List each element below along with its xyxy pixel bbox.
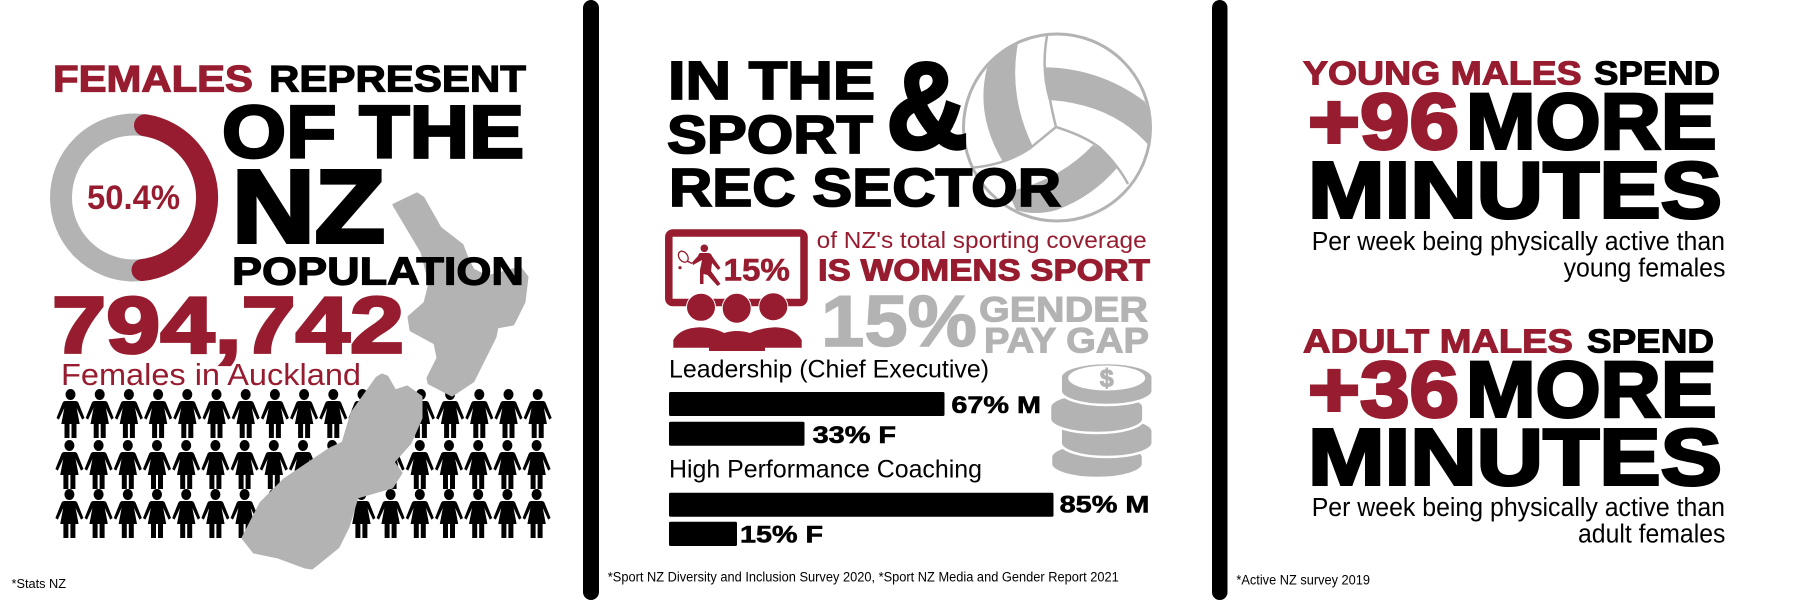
statistic: +36: +36 bbox=[1308, 346, 1459, 433]
heading: in the sport and rec sector bbox=[667, 37, 1061, 218]
icon: screen with audience bbox=[669, 233, 804, 351]
statistic: +96: +96 bbox=[1308, 78, 1459, 165]
text: per week young: young females bbox=[1564, 254, 1725, 282]
heading: more minutes bbox=[1308, 346, 1722, 501]
heading: in the sport and rec sector: & bbox=[886, 37, 968, 175]
panel: sport and recreation sector: PAY GAP bbox=[984, 321, 1149, 360]
bar: 67% male bbox=[669, 392, 1041, 418]
text: per week adult bbox=[1312, 494, 1725, 549]
bar: 85% male bbox=[669, 492, 1149, 518]
heading: more minutes bbox=[1308, 78, 1722, 234]
icon: tennis player bbox=[676, 244, 720, 286]
statistic: 15% gender pay gap: 15% bbox=[821, 282, 977, 362]
text: per week young: Per week being physically active than bbox=[1312, 228, 1725, 256]
bar: 15% female: 15% F bbox=[740, 522, 823, 548]
panel: physical activity bbox=[1236, 55, 1725, 587]
text: per week young bbox=[1312, 228, 1725, 282]
heading: in the sport and rec sector: IN THE bbox=[668, 50, 875, 111]
map: New Zealand bbox=[243, 194, 527, 568]
heading: of the NZ population: NZ bbox=[232, 150, 385, 264]
panel: population bbox=[12, 57, 552, 591]
heading: females represent: REPRESENT bbox=[269, 57, 526, 100]
icon: screen with audience: 15% bbox=[724, 253, 790, 287]
divider: right bbox=[1212, 0, 1228, 600]
bar: 33% female bbox=[669, 422, 896, 448]
block: young males bbox=[1303, 55, 1725, 282]
heading: of the NZ population: POPULATION bbox=[232, 250, 524, 293]
icon: volleyball bbox=[964, 34, 1151, 221]
label: females in Auckland: Females in Auckland bbox=[61, 357, 361, 392]
block: adult males bbox=[1303, 323, 1725, 549]
icon: coin stack: $ bbox=[1100, 364, 1114, 392]
divider: left bbox=[583, 0, 599, 600]
text: per week adult: Per week being physically active than bbox=[1312, 494, 1725, 522]
source: Stats NZ: *Stats NZ bbox=[12, 576, 66, 591]
text: per week adult: adult females bbox=[1578, 521, 1725, 549]
audience bbox=[673, 293, 802, 351]
heading: in the sport and rec sector: SPORT bbox=[667, 104, 873, 165]
label: high performance coaching: High Performance Coaching bbox=[669, 456, 982, 484]
icon: coin stack bbox=[1050, 363, 1153, 478]
text: sporting coverage: of NZ's total sporting coverage bbox=[817, 227, 1147, 253]
panel: sport and recreation sector bbox=[608, 34, 1153, 585]
bar: 85% male: 85% M bbox=[1060, 492, 1149, 518]
donut chart: 50.4% bbox=[61, 124, 207, 270]
bar: 15% female bbox=[669, 522, 823, 548]
bar: 33% female: 33% F bbox=[813, 422, 896, 448]
statistic: 15% gender pay gap: GENDER bbox=[979, 290, 1148, 329]
statistic: 794,742: 794,742 bbox=[52, 280, 404, 370]
source: Sport NZ surveys: *Sport NZ Diversity and Inclusion Survey 2020, *Sport NZ Media and Gender Report 2021 bbox=[608, 570, 1119, 585]
heading: females represent: FEMALES bbox=[53, 57, 253, 100]
donut chart: 50.4%: 50.4% bbox=[87, 179, 180, 217]
source: Active NZ: *Active NZ survey 2019 bbox=[1236, 571, 1370, 587]
text: is womens sport: IS WOMENS SPORT bbox=[818, 254, 1150, 288]
heading: of the NZ population bbox=[222, 90, 524, 293]
pictogram: rows of female figures bbox=[55, 389, 552, 538]
bar chart: high performance coaching bbox=[669, 456, 1149, 548]
label: leadership: Leadership (Chief Executive) bbox=[669, 356, 989, 384]
bar: 67% male: 67% M bbox=[951, 392, 1041, 418]
heading: in the sport and rec sector: REC SECTOR bbox=[669, 157, 1061, 218]
bar chart: leadership bbox=[669, 356, 1041, 448]
heading: of the NZ population: OF THE bbox=[222, 90, 524, 173]
